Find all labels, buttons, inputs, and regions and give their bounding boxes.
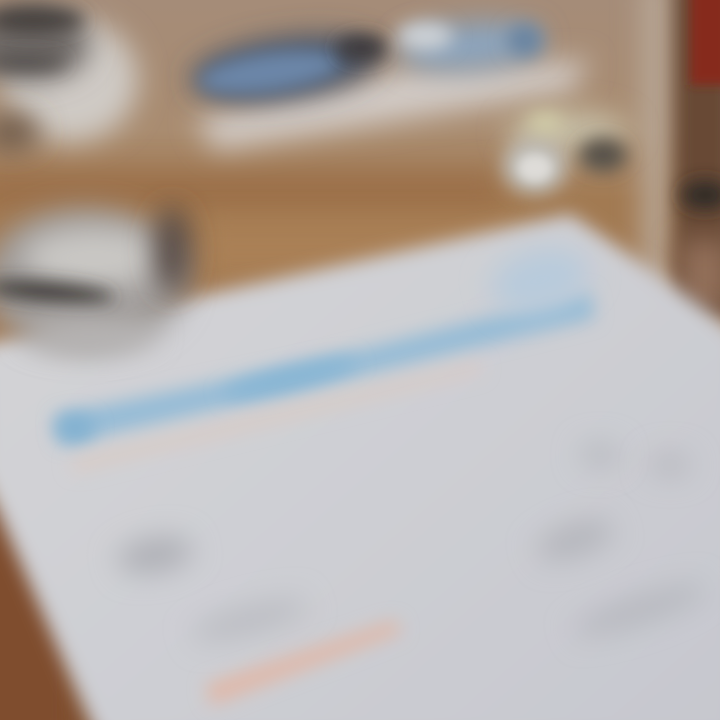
blue header band xyxy=(55,239,596,445)
small glass object xyxy=(503,110,630,194)
paper sheet xyxy=(0,214,720,720)
orange highlight band xyxy=(205,620,402,705)
faint orange line under header xyxy=(70,362,482,472)
mid-left bowl xyxy=(0,206,190,352)
top-left bowl xyxy=(0,7,138,150)
right side objects xyxy=(642,0,720,320)
white plate with blue dishes xyxy=(187,16,590,150)
faint chart marks xyxy=(115,443,711,648)
